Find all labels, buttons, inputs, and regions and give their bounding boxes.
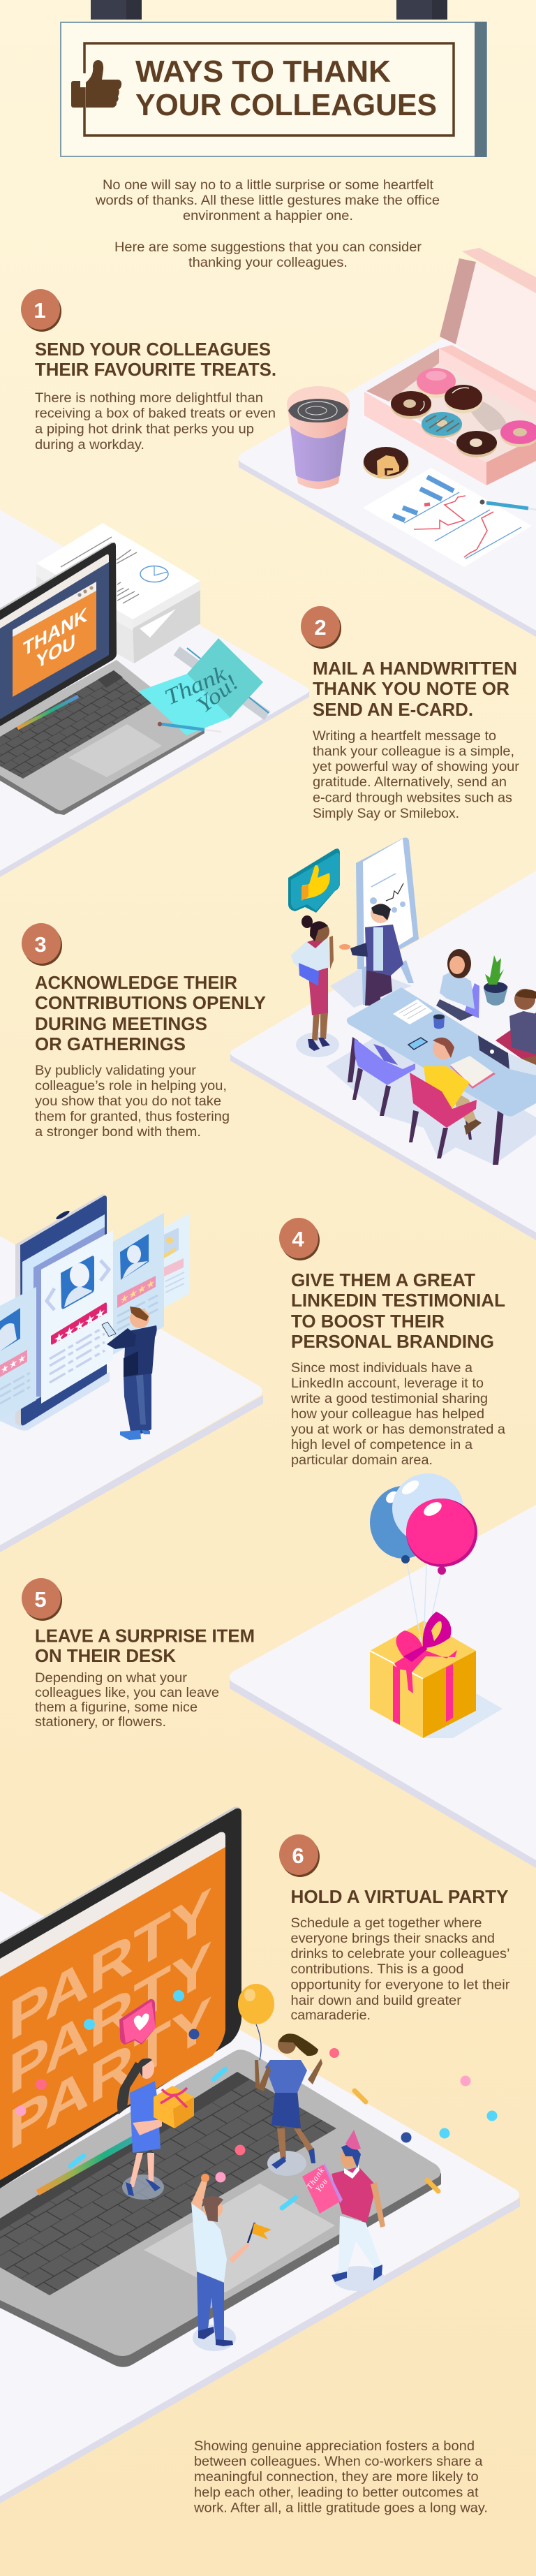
step 3 badge <box>22 923 62 966</box>
step 4 body: Since most individuals have a <box>291 1361 472 1376</box>
step 4 body <box>290 1361 505 1468</box>
step 2 heading: SEND AN E-CARD. <box>313 699 473 720</box>
intro text: environment a happier one. <box>183 209 353 223</box>
card: Thank <box>304 2165 326 2191</box>
gold balloon <box>238 1984 274 2060</box>
step 1 body: during a workday. <box>35 438 144 452</box>
thank you note <box>138 638 263 735</box>
table <box>347 987 536 1165</box>
floor shadows <box>326 967 536 1165</box>
confetti <box>15 1990 497 2208</box>
step 4 body: LinkedIn account, leverage it to <box>291 1376 484 1391</box>
woman standing <box>291 915 339 1057</box>
speech bubble with thumb <box>288 848 340 913</box>
step 1 badge <box>21 289 61 332</box>
laptop on table <box>478 1036 536 1075</box>
step 4 body: how your colleague has helped <box>291 1407 484 1422</box>
step 1 body: There is nothing more delightful than <box>35 391 263 406</box>
step 1 badge: 1 <box>34 298 46 323</box>
left card <box>0 1287 36 1421</box>
step 2 heading: THANK YOU NOTE OR <box>313 678 509 699</box>
rating bar: ★★★★★ <box>54 1304 105 1348</box>
step 4 heading <box>291 1269 505 1352</box>
intro text: Here are some suggestions that you can consider <box>114 240 422 255</box>
step 4 heading: GIVE THEM A GREAT <box>291 1269 475 1290</box>
step 2 body: gratitude. Alternatively, send an <box>313 775 507 790</box>
thank you note: Thank <box>161 661 230 709</box>
step 2 body: Simply Say or Smilebox. <box>313 807 459 821</box>
screen text: party: PARTY <box>8 1929 212 2108</box>
mug <box>433 1014 445 1029</box>
step 6 text block <box>290 1886 510 2023</box>
person in yellow with pink chair <box>409 1038 482 1158</box>
phone base shadow <box>0 1372 110 1431</box>
man with glasses <box>496 989 536 1067</box>
step 5 text block <box>35 1626 255 1730</box>
screen text: party: PARTY <box>8 1985 212 2163</box>
gift box <box>370 1621 476 1738</box>
step 4 body: you at work or has demonstrated a <box>291 1422 505 1437</box>
paper stack <box>36 523 200 663</box>
laptop base <box>0 660 204 815</box>
step 4 badge: 4 <box>292 1227 304 1251</box>
step 6 body: camaraderie. <box>290 2008 371 2023</box>
donut box <box>364 248 536 485</box>
step 6 body: everyone brings their snacks and <box>290 1931 495 1946</box>
step 3 body <box>35 1063 230 1140</box>
floor <box>230 1505 536 1868</box>
step 1 body: receiving a box of baked treats or even <box>35 406 276 421</box>
pen <box>480 500 536 510</box>
step 1 body: a piping hot drink that perks you up <box>35 422 254 437</box>
step 3 text block <box>35 972 266 1140</box>
heart bubble <box>119 1999 156 2045</box>
woman with balloon <box>255 2033 322 2176</box>
step 4 heading: LINKEDIN TESTIMONIAL <box>291 1290 505 1311</box>
step 2 body: thank your colleague is a simple, <box>313 744 514 759</box>
man with thank you card <box>302 2130 385 2291</box>
panel: step 4 illustration <box>0 1194 263 1552</box>
bow <box>396 1612 451 1665</box>
step 3 body: a stronger bond with them. <box>35 1125 201 1140</box>
purple chair <box>352 1038 415 1116</box>
closing text: meaningful connection, they are more likely to <box>194 2470 479 2485</box>
panel: step 2 illustration <box>0 510 309 877</box>
step 4 heading: TO BOOST THEIR <box>291 1311 445 1332</box>
step 2 badge: 2 <box>314 615 327 640</box>
step 6 body <box>290 1916 510 2023</box>
step 5 heading: LEAVE A SURPRISE ITEM <box>35 1626 255 1647</box>
floor <box>230 871 536 1240</box>
step 6 body: drinks to celebrate your colleagues’ <box>290 1947 509 1962</box>
right card <box>113 1213 164 1355</box>
desk surface <box>0 1891 520 2503</box>
step 3 body: them for granted, thus fostering <box>35 1110 230 1124</box>
step 1 text block <box>35 339 276 452</box>
step 2 heading <box>313 658 517 720</box>
step 6 heading: HOLD A VIRTUAL PARTY <box>290 1886 508 1907</box>
right card: ★★★★ <box>120 1276 155 1307</box>
balloons <box>370 1473 477 1575</box>
step 3 heading <box>35 972 266 1054</box>
pen <box>158 722 221 732</box>
plant <box>484 955 508 1006</box>
step 5 body: Depending on what your <box>35 1671 188 1686</box>
whiteboard <box>356 838 419 1005</box>
step 6 body: opportunity for everyone to let their <box>290 1978 510 1993</box>
step 5 body: stationery, or flowers. <box>35 1715 166 1730</box>
man with flag <box>191 2174 271 2351</box>
light balloon <box>392 1473 463 1543</box>
step 6 badge: 6 <box>292 1843 304 1868</box>
sign board <box>61 22 486 157</box>
step 2 heading: MAIL A HANDWRITTEN <box>313 658 517 679</box>
step 1 body <box>35 391 276 452</box>
intro text <box>95 178 440 270</box>
chocolate round donut <box>445 385 482 413</box>
laptop base <box>0 2049 441 2367</box>
desk surface <box>0 510 309 877</box>
chart paper <box>363 468 532 567</box>
step 3 body: you show that you do not take <box>35 1094 221 1109</box>
title: YOUR COLLEAGUES <box>135 88 437 122</box>
laptop screen <box>0 1806 241 2188</box>
sprinkled donut <box>456 431 497 457</box>
card: You <box>313 2177 329 2194</box>
step 5 body <box>35 1671 219 1730</box>
step 1 heading: SEND YOUR COLLEAGUES <box>35 339 271 360</box>
title sign <box>61 0 486 157</box>
balloon strings <box>407 1562 441 1644</box>
man looking at phone <box>102 1307 157 1440</box>
intro text: words of thanks. All these little gestures make the office <box>95 193 440 208</box>
step 2 badge <box>301 606 341 649</box>
step 2 text block <box>313 658 520 821</box>
panel: step 6 illustration <box>0 1806 520 2503</box>
screen text: party <box>8 1876 212 2163</box>
step 3 badge: 3 <box>34 932 47 957</box>
step 4 body: particular domain area. <box>291 1453 433 1468</box>
left card: ★★★ <box>1 1352 26 1377</box>
laptop screen <box>0 542 117 726</box>
small gift <box>154 2086 194 2128</box>
pink donut <box>417 368 456 398</box>
step 3 heading: DURING MEETINGS <box>35 1013 207 1034</box>
coffee cup <box>287 386 350 489</box>
step 4 heading: PERSONAL BRANDING <box>291 1331 494 1352</box>
ruler <box>177 648 269 716</box>
card <box>302 2163 343 2214</box>
step 5 badge: 5 <box>34 1587 47 1612</box>
step 4 badge <box>279 1218 320 1260</box>
avatar <box>61 1256 94 1309</box>
blue donut <box>422 412 462 438</box>
main profile card <box>41 1230 113 1404</box>
pink balloon <box>406 1499 477 1575</box>
step 2 body: e-card through websites such as <box>313 790 512 806</box>
step 6 body: contributions. This is a good <box>290 1962 463 1977</box>
man presenting <box>339 904 403 1006</box>
panel: step 1 illustration <box>239 248 536 637</box>
step 2 body: Writing a heartfelt message to <box>313 729 496 744</box>
woman with gift <box>117 2058 194 2200</box>
screen text: YOU <box>36 630 75 674</box>
bitten donut <box>363 447 409 479</box>
closing text <box>193 2439 488 2515</box>
title: WAYS TO THANK <box>135 54 391 89</box>
step 5 badge <box>22 1578 62 1621</box>
closing text: work. After all, a little gratitude goes a long way. <box>193 2501 488 2515</box>
step 5 body: colleagues like, you can leave <box>35 1686 219 1700</box>
step 2 body <box>313 729 520 821</box>
panel: step 5 illustration <box>230 1473 536 1868</box>
gift shadow <box>423 1693 502 1738</box>
phone <box>408 1038 427 1050</box>
phone <box>15 1194 107 1427</box>
closing text: help each other, leading to better outcomes at <box>194 2486 479 2500</box>
sign hanger straps <box>91 0 447 20</box>
step 6 body: Schedule a get together where <box>290 1916 482 1931</box>
thank you note: You! <box>191 670 243 718</box>
floor <box>0 1236 263 1552</box>
pink ring donut <box>500 420 536 447</box>
step 3 heading: CONTRIBUTIONS OPENLY <box>35 992 266 1013</box>
intro text: thanking your colleagues. <box>188 256 348 270</box>
desk surface <box>239 285 536 637</box>
blue balloon <box>370 1486 437 1563</box>
step 5 heading: ON THEIR DESK <box>35 1645 176 1666</box>
step 4 text block <box>290 1269 505 1468</box>
step 4 body: write a good testimonial sharing <box>290 1392 488 1406</box>
step 1 heading: THEIR FAVOURITE TREATS. <box>35 359 276 380</box>
far right card <box>164 1213 190 1308</box>
chocolate ring donut <box>391 391 431 419</box>
step 4 body: high level of competence in a <box>291 1438 472 1452</box>
flag <box>248 2223 271 2243</box>
step 2 body: yet powerful way of showing your <box>313 760 520 774</box>
screen text: THANK <box>23 603 87 661</box>
step 3 body: colleague’s role in helping you, <box>35 1079 227 1094</box>
screen text: party: PARTY <box>8 1876 212 2054</box>
step 3 body: By publicly validating your <box>35 1063 197 1078</box>
intro text: No one will say no to a little surprise or some heartfelt <box>103 178 434 193</box>
closing text: between colleagues. When co-workers share a <box>194 2454 483 2469</box>
step 6 body: hair down and build greater <box>290 1994 462 2008</box>
seated woman <box>436 949 479 1021</box>
step 5 body: them a figurine, some nice <box>35 1700 198 1715</box>
step 3 heading: OR GATHERINGS <box>35 1033 186 1054</box>
paper on table <box>393 999 433 1024</box>
step 1 heading <box>35 339 276 380</box>
panel: step 3 illustration <box>230 838 536 1240</box>
open book <box>450 1056 496 1089</box>
closing text: Showing genuine appreciation fosters a bond <box>194 2439 475 2454</box>
title <box>135 54 437 122</box>
step 6 badge <box>279 1834 320 1877</box>
step 5 heading <box>35 1626 255 1666</box>
step 3 heading: ACKNOWLEDGE THEIR <box>35 972 237 993</box>
icon: thumbs up <box>71 60 121 108</box>
